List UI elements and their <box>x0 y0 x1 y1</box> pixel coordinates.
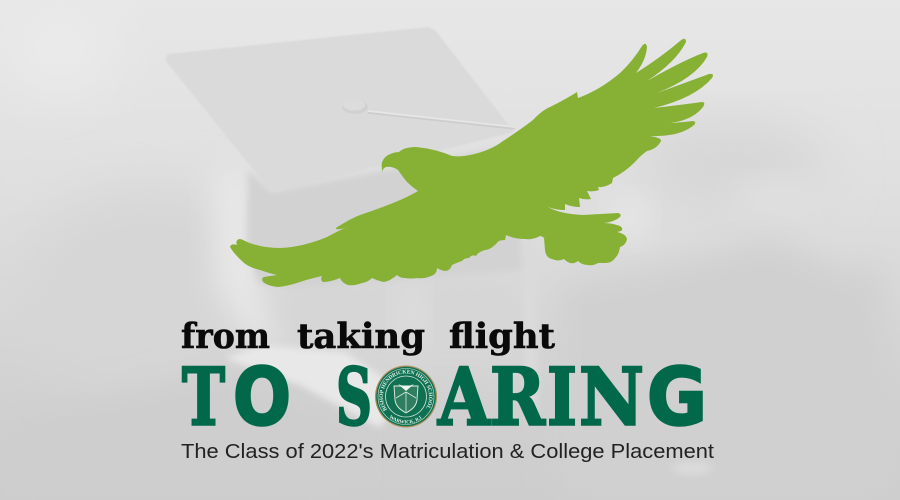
heading: to soaring: I <box>547 350 577 444</box>
heading: to soaring: G <box>647 352 707 444</box>
heading: to soaring: S <box>336 350 372 444</box>
school seal: WARWICK, R.I. <box>390 414 422 424</box>
heading: to soaring: N <box>579 350 644 444</box>
heading: from taking flight: taking <box>297 316 425 357</box>
heading: to soaring: R <box>490 350 546 444</box>
school seal: BISHOP HENDRICKEN HIGH SCHOOL <box>379 370 433 412</box>
heading: to soaring: O <box>233 352 291 444</box>
heading: to soaring: A <box>437 350 491 444</box>
graduation cap <box>165 27 522 288</box>
heading: from taking flight: flight <box>449 316 555 357</box>
heading: to soaring <box>182 350 707 444</box>
school seal <box>375 366 437 428</box>
heading: from taking flight: from <box>181 316 270 357</box>
heading: from taking flight <box>181 316 555 357</box>
subtitle: The Class of 2022's Matriculation & College Placement <box>181 440 714 463</box>
icon: green eagle silhouette <box>230 39 713 287</box>
heading: to soaring: T <box>182 350 225 444</box>
